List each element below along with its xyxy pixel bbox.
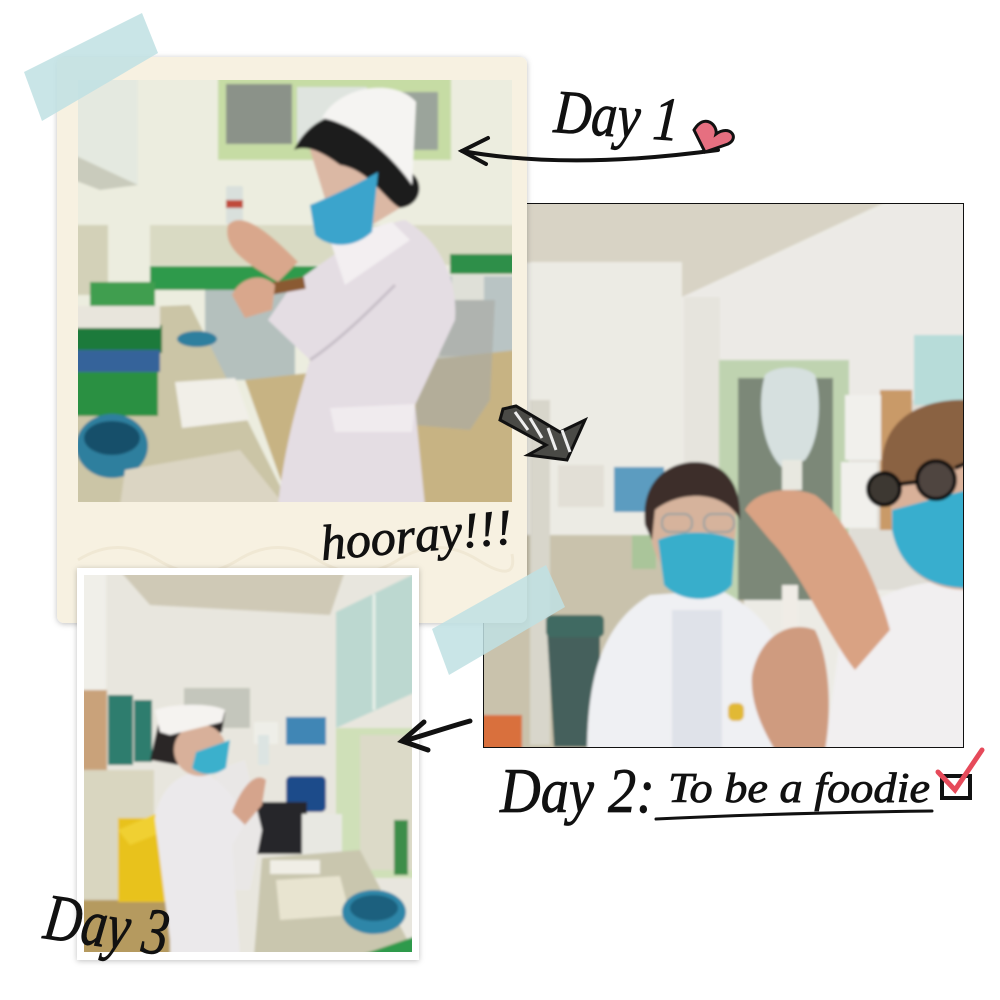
arrow: hatched, pointing to Day 2 <box>500 406 585 460</box>
arrow: Day 1 to photo <box>462 138 718 164</box>
photo: Day 2 two nurses with infusion bottle <box>480 200 967 750</box>
label: Day 3: Day 3 <box>39 880 174 970</box>
panel: Day 1 polaroid <box>57 57 527 623</box>
photo frame: Day 3 white border <box>77 568 419 960</box>
underline: To be a foodie <box>656 811 932 819</box>
photo: Day 1 nurse preparing a syringe <box>74 76 516 506</box>
photo: Day 3 nurses at the counter <box>80 571 416 956</box>
icon: pink heart <box>694 121 733 152</box>
tape: Day 1 polaroid corner <box>24 13 158 121</box>
icon: checkbox with red tick <box>938 750 982 798</box>
label: Day 2: Day 2: <box>499 755 655 826</box>
label: To be a foodie: To be a foodie <box>668 766 930 812</box>
label: Day 1: Day 1 <box>551 78 681 155</box>
label: hooray: hooray!!! <box>318 498 514 571</box>
tape: Day 2 photo corner <box>432 565 565 675</box>
arrow: pointing to Day 3 cabinet <box>402 721 470 750</box>
